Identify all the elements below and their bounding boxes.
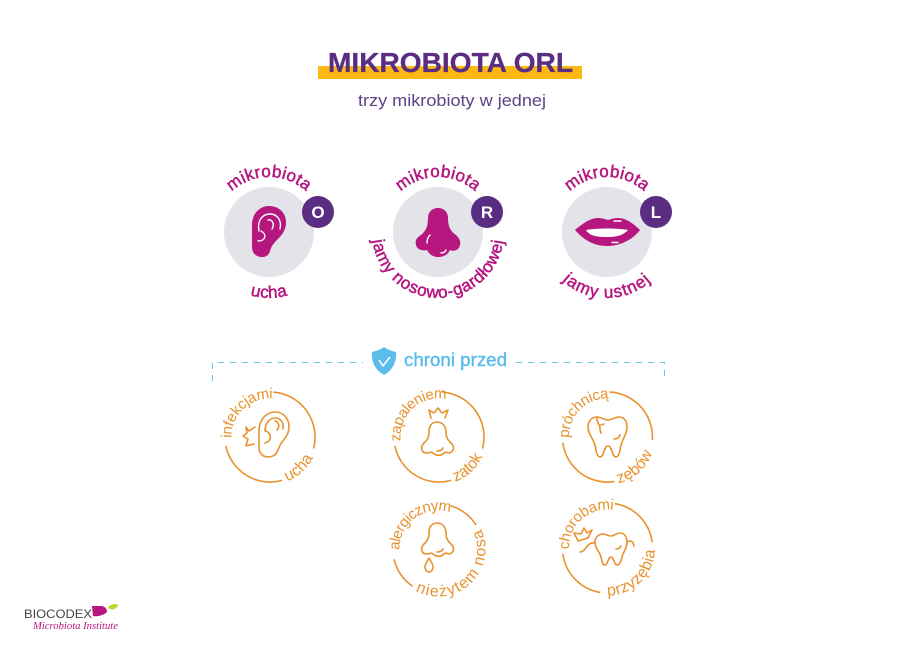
icon: sore ear (243, 412, 289, 457)
badge: O (302, 196, 334, 228)
heading: protects against: chroni przed (404, 350, 507, 370)
icon: decayed tooth (588, 417, 627, 457)
panel: microbiota of the ear: mikrobiota (226, 164, 310, 192)
panel: periodontal diseases (558, 498, 656, 599)
icon: inflamed nose (422, 408, 453, 455)
panel: ear infections: infekcjami (220, 388, 272, 437)
panel: caries: próchnicą (560, 390, 609, 438)
panel: sinusitis: zapaleniem (392, 390, 446, 441)
icon: lips (575, 218, 640, 246)
panel: microbiota of the mouth: mikrobiota (564, 164, 648, 192)
icon: tooth with gum pain (574, 528, 634, 565)
bracket line (212, 362, 664, 381)
title: MIKROBIOTA ORL (328, 47, 573, 78)
panel: allergic rhinitis (390, 502, 486, 598)
badge: L: L (651, 203, 661, 222)
panel: caries (560, 390, 654, 484)
panel: microbiota of the mouth: jamy ustnej (559, 272, 652, 300)
panel: microbiota of the nasopharynx (368, 164, 507, 298)
panel: caries: zębów (616, 449, 652, 484)
icon: nose (416, 208, 460, 257)
badge: R (471, 196, 503, 228)
panel: microbiota of the nasopharynx: mikrobiota (396, 164, 479, 192)
icon: shield (372, 347, 396, 375)
panel: microbiota of the nasopharynx: jamy nosowo-gardłowej (368, 239, 507, 298)
badge: L (640, 196, 672, 228)
panel: sinusitis: zatok (452, 452, 482, 482)
panel: microbiota of the ear: ucha (252, 285, 288, 298)
panel: allergic rhinitis: nieżytem nosa (416, 528, 486, 598)
panel: microbiota of the mouth (559, 164, 672, 300)
panel: sinusitis (392, 390, 485, 483)
logo: Biocodex Microbiota Institute: Microbiota Institute (32, 621, 118, 632)
panel: microbiota of the ear (224, 164, 334, 298)
logo: Biocodex Microbiota Institute: BIOCODEX (24, 609, 92, 621)
badge: R: R (481, 203, 493, 222)
panel: allergic rhinitis: alergicznym (390, 502, 450, 550)
badge: O: O (311, 203, 325, 222)
logo: Biocodex Microbiota Institute (24, 604, 118, 632)
panel: periodontal diseases: chorobami (558, 498, 614, 548)
icon: ear (252, 206, 286, 257)
heading: protects against (372, 347, 507, 375)
icon: runny nose (422, 523, 453, 572)
panel: ear infections: ucha (284, 455, 313, 480)
panel: periodontal diseases: przyzębia (608, 550, 656, 599)
panel: ear infections (220, 388, 316, 483)
subtitle: trzy mikrobioty w jednej (358, 91, 546, 110)
